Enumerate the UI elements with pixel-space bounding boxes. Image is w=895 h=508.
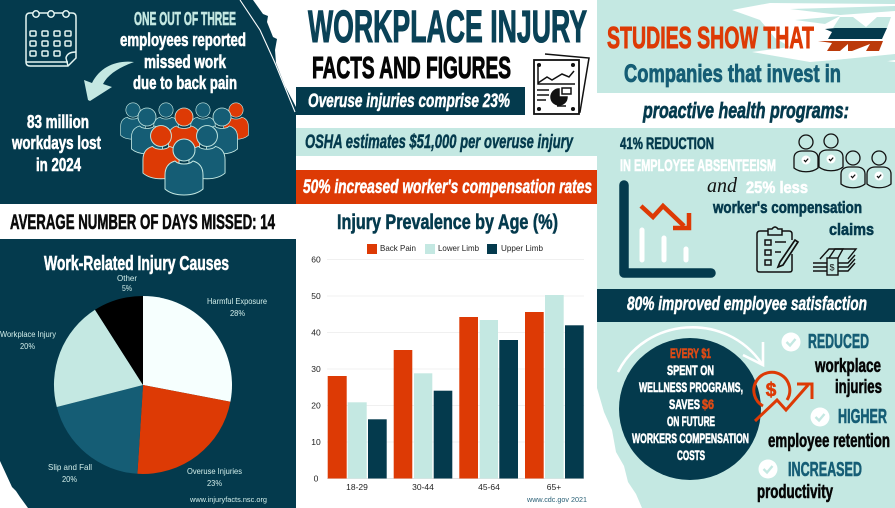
pie chart xyxy=(54,296,232,474)
icon: dollar growth: $ xyxy=(766,380,777,401)
pie labels: Overuse Injuries xyxy=(187,466,242,476)
pie labels: Other xyxy=(117,273,137,283)
panel: wellness savings xyxy=(597,322,895,508)
pie labels xyxy=(0,273,267,488)
y axis labels: 60 xyxy=(311,254,321,264)
benefit: increased productivity: productivity xyxy=(757,482,833,503)
legend: Back Pain xyxy=(380,243,416,253)
circle: every dollar: SAVES xyxy=(669,396,700,412)
band: employee satisfaction xyxy=(597,289,895,322)
band: overuse injuries xyxy=(296,87,525,115)
text: employees reported missed work: employees reported xyxy=(120,30,246,50)
x axis labels: 65+ xyxy=(547,482,561,492)
bars: back pain xyxy=(328,312,544,478)
band: compensation rates: 50% increased worker's compensation rates xyxy=(303,177,592,198)
pie labels: Workplace Injury xyxy=(0,329,57,339)
circle: every dollar xyxy=(619,338,761,480)
text: employees reported missed work: due to back pain xyxy=(133,73,237,93)
benefit: higher employee retention xyxy=(768,406,890,452)
text: and: and xyxy=(707,173,737,197)
circle: every dollar: EVERY $1 xyxy=(670,345,711,361)
logo: M xyxy=(818,17,891,51)
text: worker's compensation claims: claims xyxy=(829,220,874,239)
heading: work-related injury causes: Work-Related Injury Causes xyxy=(44,253,229,275)
band: OSHA estimate: OSHA estimates $51,000 per overuse injury xyxy=(305,132,574,153)
y axis labels: 10 xyxy=(311,437,321,447)
legend xyxy=(367,243,543,254)
benefit: increased productivity xyxy=(757,459,862,503)
icon: crowd of people xyxy=(121,103,248,195)
band: OSHA estimate xyxy=(296,128,597,156)
icon: clipboard xyxy=(757,227,798,272)
icon: people with checks xyxy=(794,134,891,188)
source: cdc: www.cdc.gov 2021 xyxy=(526,495,587,504)
circle: every dollar: WELLNESS PROGRAMS, xyxy=(639,379,743,395)
text: 41% reduction: 41% REDUCTION xyxy=(620,134,714,153)
text: 83 million workdays lost: in 2024 xyxy=(36,155,81,175)
y axis labels: 20 xyxy=(311,400,321,410)
x axis labels: 30-44 xyxy=(412,482,434,492)
title: WORKPLACE INJURY xyxy=(308,1,587,52)
band: overuse injuries: Overuse injuries comprise 23% xyxy=(308,91,510,112)
x axis labels xyxy=(346,482,561,492)
icon: calendar xyxy=(26,11,76,66)
arrow: white arc xyxy=(618,327,763,372)
icon: report pages xyxy=(534,54,589,114)
bars: upper limb xyxy=(368,325,584,478)
text: 83 million workdays lost: 83 million xyxy=(27,112,89,132)
panel: injury causes xyxy=(0,239,296,508)
circle: every dollar: SPENT ON xyxy=(667,362,714,378)
y axis labels: 50 xyxy=(311,291,321,301)
pie labels: Harmful Exposure xyxy=(207,296,267,306)
text: one out of three: ONE OUT OF THREE xyxy=(134,9,236,29)
y axis labels xyxy=(311,254,321,484)
text: worker's compensation claims xyxy=(712,198,874,239)
legend: Lower Limb xyxy=(438,243,479,253)
bars: lower limb xyxy=(348,295,564,478)
icon: money stack: $ xyxy=(830,262,835,272)
text: 25% less: 25% less xyxy=(746,178,808,197)
circle: every dollar: WORKERS COMPENSATION xyxy=(632,430,749,446)
icon: money stack xyxy=(813,249,856,275)
text: 83 million workdays lost: workdays lost xyxy=(11,133,101,153)
text: 83 million workdays lost xyxy=(11,112,101,175)
band: compensation rates xyxy=(296,170,597,204)
circle: every dollar: COSTS xyxy=(677,447,705,463)
y axis labels: 40 xyxy=(311,328,321,338)
y axis labels: 30 xyxy=(311,364,321,374)
panel: missed work xyxy=(0,0,296,204)
heading: average days missed: AVERAGE NUMBER OF DAYS MISSED: 14 xyxy=(10,211,275,234)
x axis labels: 45-64 xyxy=(478,482,500,492)
bar chart xyxy=(311,243,587,504)
source: injuryfacts: www.injuryfacts.nsc.org xyxy=(189,495,267,504)
circle: every dollar: ON FUTURE xyxy=(667,413,715,429)
pie labels: 20% xyxy=(20,341,35,351)
x axis labels: 18-29 xyxy=(346,482,368,492)
panel: benefits xyxy=(597,128,895,289)
subtitle: FACTS AND FIGURES xyxy=(312,50,511,85)
benefit: reduced workplace injuries xyxy=(782,331,882,398)
heading: injury prevalence: Injury Prevalence by Age (%) xyxy=(337,211,558,234)
text: employees reported missed work: missed work xyxy=(144,52,227,72)
pie labels: 5% xyxy=(122,283,132,293)
arrow: curved down-left xyxy=(84,62,134,101)
legend: Upper Limb xyxy=(501,243,543,253)
icon: declining chart xyxy=(624,185,711,273)
text: employees reported missed work xyxy=(120,30,246,93)
y axis labels: 0 xyxy=(314,474,319,484)
text: employee absenteeism: IN EMPLOYEE ABSENTEEISM xyxy=(620,156,776,175)
pie labels: 28% xyxy=(230,308,245,318)
pie labels: 20% xyxy=(62,474,77,484)
panel: studies show xyxy=(597,0,895,93)
pie labels: Slip and Fall xyxy=(48,462,92,472)
pie labels: 23% xyxy=(207,478,222,488)
circle: every dollar: $6 xyxy=(702,396,714,412)
icon: dollar growth xyxy=(754,372,812,421)
